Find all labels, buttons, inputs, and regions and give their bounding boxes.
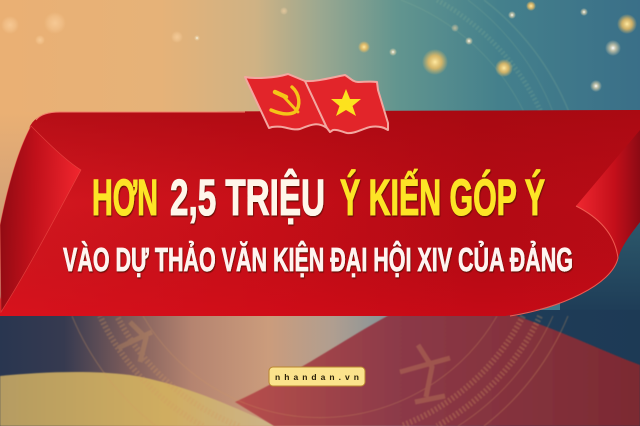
background: left side below the ribbon top: [0, 112, 60, 315]
background: beige corner shape: [0, 372, 276, 426]
ribbon top highlight: [36, 112, 245, 120]
background: drum rings in the sky: [401, 0, 569, 112]
background: lower band: [0, 310, 640, 426]
background: warm to teal sky: [0, 0, 640, 310]
left ribbon curl: [0, 126, 81, 312]
icon: party flag: [245, 74, 327, 129]
ribbon main body: [0, 110, 640, 316]
background: red flag shape: [235, 312, 640, 426]
title word: Hơn: HƠN: [92, 169, 158, 226]
flags icon: [245, 74, 388, 133]
right curl edge highlight: [510, 206, 618, 316]
ribbon shading: [0, 110, 640, 316]
source badge: [269, 367, 365, 386]
right ribbon curl: [576, 130, 640, 258]
icon: national flag: [305, 75, 388, 133]
background: drum pattern rings: [72, 316, 568, 426]
title line 1: [92, 168, 545, 226]
icon: yellow star: [331, 89, 361, 116]
icon: hammer and sickle: [271, 87, 299, 114]
background: dark right side: [560, 111, 640, 320]
source text: nhandan.vn: [275, 372, 359, 382]
decorative glowing stars: [1, 1, 637, 92]
red ribbon banner: [0, 110, 640, 316]
title word: 2,5 triệu: 2,5 TRIỆU: [170, 168, 325, 226]
